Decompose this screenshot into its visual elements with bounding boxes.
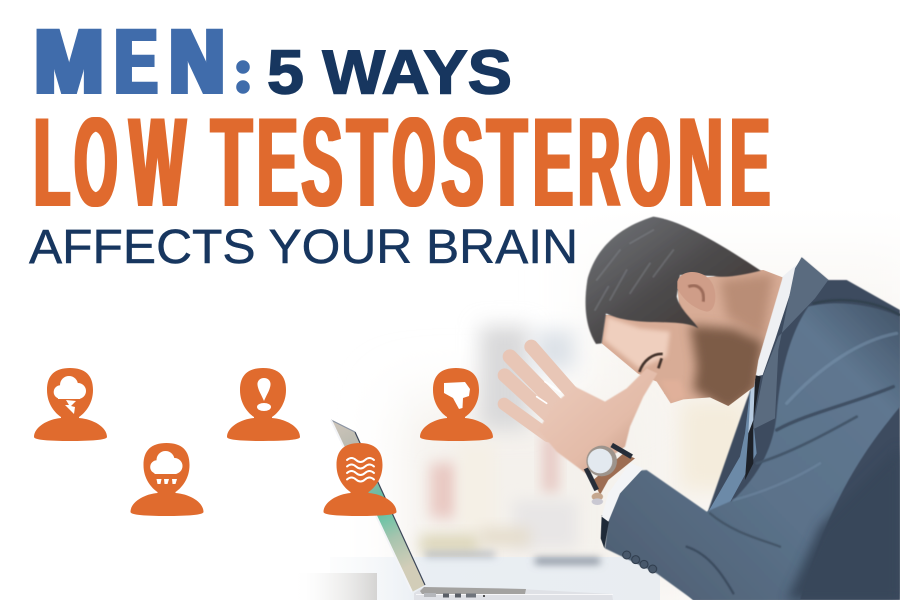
heading: LOW TESTOSTERONE: T: [487, 91, 527, 233]
sleeve: [605, 303, 900, 600]
bracelet: [592, 493, 603, 501]
shirt cuff: [602, 463, 643, 522]
heading: LOW TESTOSTERONE: N: [678, 91, 723, 233]
heading: AFFECTS YOUR BRAIN: AFFECTS YOUR BRAIN: [29, 221, 578, 274]
lapel: [752, 257, 828, 430]
title block: [29, 11, 770, 274]
sleeve buttons: [623, 551, 657, 573]
closed eye: [639, 354, 663, 372]
laptop screen: [331, 420, 425, 592]
watch face: [588, 449, 612, 473]
heading: LOW TESTOSTERONE: T: [347, 91, 387, 233]
heading: LOW TESTOSTERONE: E: [257, 91, 298, 233]
heading: LOW TESTOSTERONE: L: [34, 91, 70, 233]
heading: LOW TESTOSTERONE: W: [130, 91, 186, 233]
heading: 5 WAYS: 5 WAYS: [267, 38, 512, 108]
tie: [745, 375, 761, 480]
ear: [677, 272, 715, 312]
heading: LOW TESTOSTERONE: O: [626, 91, 670, 233]
suit body: [687, 257, 900, 600]
face and neck: [602, 270, 783, 406]
icon: head with waves: [324, 443, 396, 516]
heading: MEN: E: [116, 11, 156, 113]
heading: LOW TESTOSTERONE: E: [533, 91, 573, 233]
heading: LOW TESTOSTERONE: O: [392, 91, 435, 233]
heading: LOW TESTOSTERONE: S: [302, 91, 342, 233]
man with head bowed: [504, 217, 900, 600]
icon: head with thumbs down: [420, 368, 493, 441]
watch case: [586, 446, 617, 476]
heading: LOW TESTOSTERONE: O: [74, 91, 117, 233]
palm and thumb: [538, 368, 657, 474]
sleeve folds: [687, 300, 900, 593]
lower body shadow: [787, 447, 900, 600]
laptop: [331, 420, 613, 600]
heading: MEN: N: [170, 11, 224, 113]
shirt sliver: [748, 378, 755, 433]
heading: LOW TESTOSTERONE: S: [442, 91, 484, 233]
blurred office photo background: [250, 0, 900, 600]
finger gaps: [537, 382, 560, 403]
icon: head with storm cloud: [34, 368, 107, 441]
icon: head with rain cloud: [130, 443, 204, 516]
hand fingers: [504, 347, 575, 436]
heading: MEN: M: [34, 11, 104, 113]
heading: LOW TESTOSTERONE: R: [578, 91, 620, 233]
skin shading and beard: [604, 273, 773, 413]
colon: [236, 60, 250, 94]
laptop base: [414, 587, 613, 600]
watch strap: [586, 445, 632, 490]
dark inner sleeve: [601, 515, 609, 548]
hair: [585, 217, 761, 344]
hair texture: [595, 230, 673, 310]
icon: head with exclamation mark: [227, 368, 300, 441]
heading: LOW TESTOSTERONE: T: [211, 91, 252, 233]
text: E: [730, 91, 770, 233]
jacket front: [708, 390, 757, 512]
shirt collar: [755, 265, 798, 377]
wrist: [593, 453, 635, 495]
